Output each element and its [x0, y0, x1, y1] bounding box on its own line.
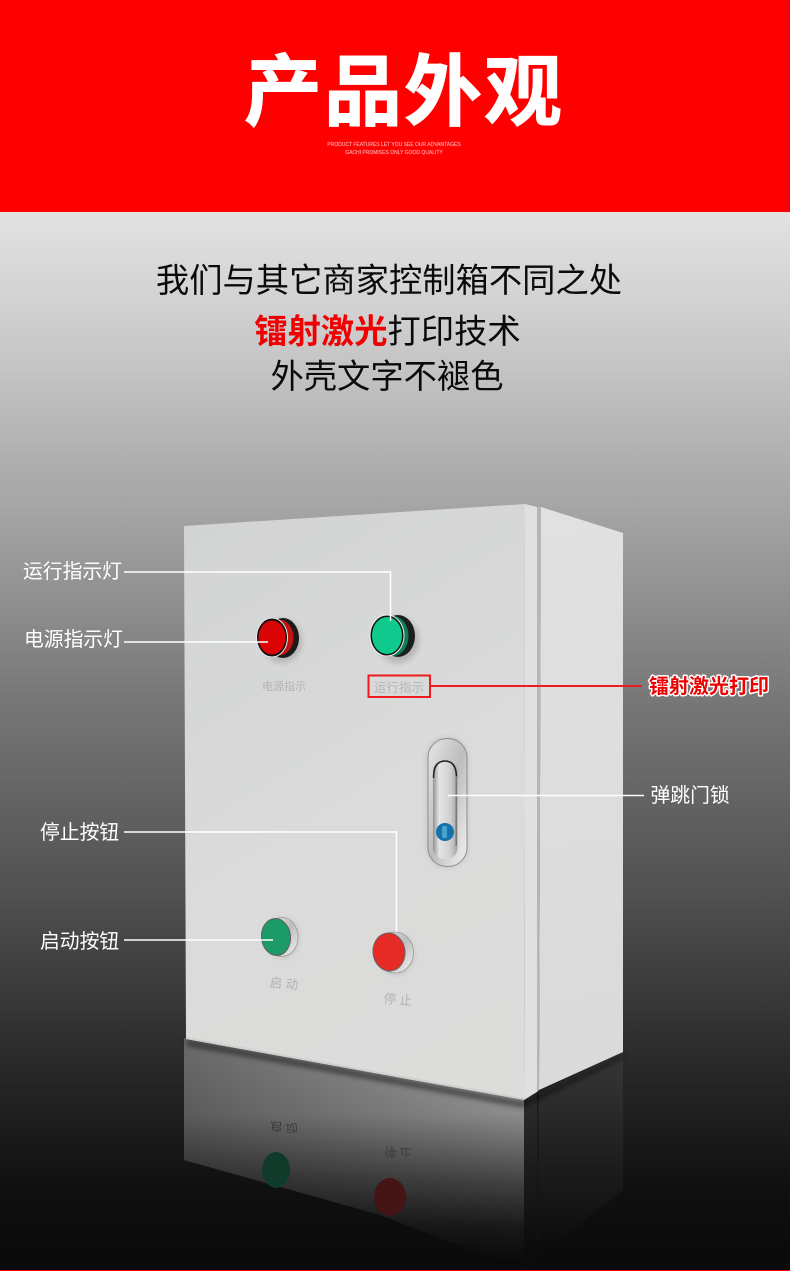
icon: green start button: [260, 917, 299, 958]
icon: red stop button: [371, 931, 414, 975]
label: run indicator print with red box: 运行指示: [374, 680, 424, 695]
floor reflection of cabinet: [184, 1038, 623, 1271]
subtitle in English: PRODUCT FEATURES LET YOU SEE OUR ADVANTAGES: [327, 142, 461, 148]
callout: stop button: 停止按钮: [40, 822, 119, 844]
reflected print labels: 启 动: [270, 1119, 298, 1135]
label: power indicator print: 电源指示: [262, 679, 306, 693]
callout: power indicator light: 电源指示灯: [24, 629, 123, 651]
callout: spring door lock: 弹跳门锁: [650, 785, 730, 807]
label: start print: 启 动: [269, 976, 299, 992]
cabinet front door: [184, 504, 525, 1100]
reflected print labels: 停 止: [384, 1144, 412, 1161]
header band: [0, 0, 790, 212]
intro text block: [156, 263, 622, 396]
icon: lock key: [436, 823, 454, 841]
bottom red line: [0, 1270, 790, 1271]
label: stop print: 停 止: [383, 991, 413, 1008]
reflected start button: [262, 1152, 290, 1188]
intro line 3: 外壳文字不褪色: [270, 359, 504, 396]
contact shadow: [186, 1040, 623, 1107]
cabinet: [184, 504, 623, 1107]
icon: door lock: [427, 738, 467, 867]
callout: laser printing: 镭射激光打印: [649, 675, 769, 698]
callout: run indicator light: [23, 561, 390, 621]
icon: red indicator light: [256, 618, 302, 663]
subtitle in English: GACHI PROMISES ONLY GOOD QUALITY: [345, 150, 443, 156]
callout: start button: 启动按钮: [40, 931, 119, 953]
callout: run indicator light: 运行指示灯: [23, 561, 122, 583]
intro line 1: 我们与其它商家控制箱不同之处: [156, 263, 622, 300]
reflected print labels: [270, 1119, 412, 1161]
reflected stop button: [374, 1178, 406, 1216]
cabinet door fold: [524, 504, 537, 1100]
icon: green indicator light: [370, 615, 419, 663]
subtitle in English: [327, 142, 461, 156]
label: run indicator print with red box: [368, 676, 430, 697]
intro line 2: laser printing: 镭射激光打印技术: [254, 314, 521, 351]
callout: stop button: [40, 822, 396, 932]
cabinet door groove: [537, 507, 541, 1092]
cabinet side panel: [539, 507, 623, 1090]
title: 产品外观: [244, 48, 564, 136]
